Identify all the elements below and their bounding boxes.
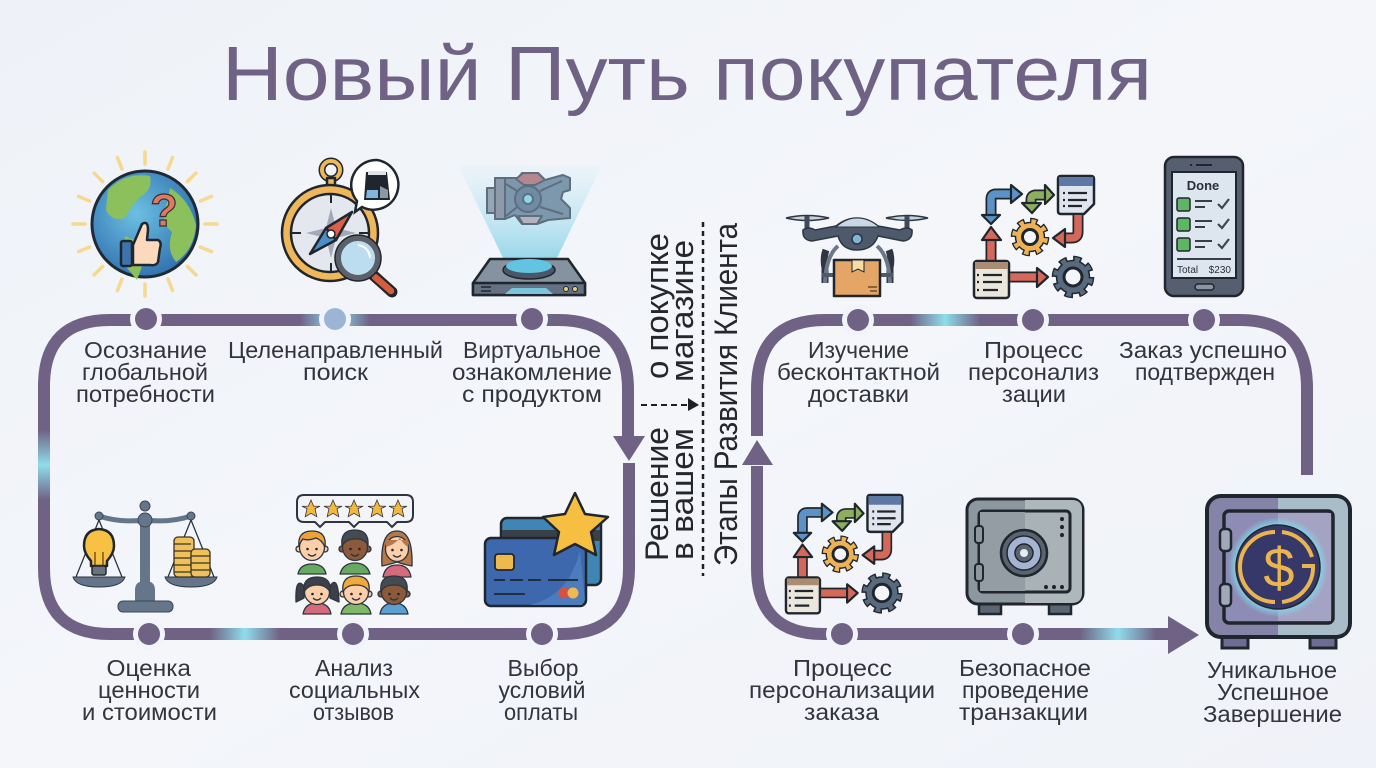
orange gear <box>1014 222 1046 252</box>
thumb up <box>133 223 161 265</box>
labels: top right: Процесс <box>984 337 1083 363</box>
labels: bottom right: Процесс <box>793 655 892 681</box>
person: boy with yellow hair <box>340 576 372 614</box>
person: dark skin blue shirt <box>378 576 410 614</box>
magnifier <box>372 274 392 292</box>
icon: personalization workflow <box>974 176 1094 298</box>
projector base <box>473 259 585 295</box>
labels: bottom left: социальных <box>289 677 420 703</box>
caption: client development stages: Этапы Развития Клиента <box>708 223 744 566</box>
arrow: left path down <box>613 436 645 461</box>
labels: bottom right: Безопасное <box>959 655 1091 681</box>
red arrow to orange gear <box>1053 215 1078 247</box>
left journey path <box>38 314 645 640</box>
labels: top right: Изучение <box>808 337 909 363</box>
labels: top left: Виртуальное <box>463 337 601 363</box>
labels: top left <box>76 337 612 407</box>
central vertical captions: о покупке <box>639 233 675 379</box>
labels: bottom right <box>749 655 1342 727</box>
labels: top left: Целенаправленный <box>228 337 443 363</box>
title: Новый Путь покупателя <box>222 31 1152 117</box>
coins <box>174 537 210 577</box>
labels: top left: поиск <box>303 359 369 385</box>
icon: scales with lightbulb and coins <box>73 501 217 612</box>
caption: decision: Решение <box>639 427 675 561</box>
labels: bottom left <box>82 655 586 725</box>
labels: top right: доставки <box>808 381 909 407</box>
icon: payment cards with star <box>485 493 608 606</box>
labels: bottom left: Оценка <box>106 655 192 681</box>
icon: delivery drone <box>786 216 928 296</box>
icon: phone order confirmation: $230 <box>1209 265 1231 276</box>
lower document <box>974 261 1009 298</box>
labels: bottom right: проведение <box>962 677 1089 703</box>
caption: in your store: в вашем <box>664 428 700 560</box>
person: orange hair <box>296 531 328 574</box>
arrow: to final safe <box>1168 616 1199 654</box>
person: dark skin green shirt <box>339 530 371 574</box>
arrow: right path up <box>742 440 773 465</box>
labels: bottom left: и стоимости <box>82 699 217 725</box>
labels: bottom left: ценности <box>98 677 200 703</box>
icon: lower personalization workflow <box>786 495 902 613</box>
labels: top right: зации <box>1002 381 1066 407</box>
speech bubble with product <box>351 160 398 212</box>
labels: bottom right: Уникальное <box>1207 657 1337 683</box>
dollar sign: $ <box>1263 536 1295 599</box>
icon: glowing final safe <box>1207 496 1350 648</box>
icon: compass with magnifier <box>282 160 398 292</box>
labels: top right: бесконтактной <box>777 359 940 385</box>
icon: globe with thumb and question <box>73 152 217 296</box>
lightbulb <box>84 529 114 566</box>
labels: top right <box>777 337 1287 407</box>
labels: top left: Осознание <box>84 337 207 363</box>
labels: bottom left: оплаты <box>504 699 578 725</box>
labels: top right: Заказ успешно <box>1119 337 1287 363</box>
labels: bottom right: Завершение <box>1203 701 1342 727</box>
icon: phone order confirmation: Total <box>1177 265 1198 276</box>
labels: bottom left: условий <box>498 677 586 703</box>
hologram object <box>487 173 570 224</box>
person: long brown hair <box>382 531 412 577</box>
labels: bottom left: Анализ <box>315 655 393 681</box>
dark gear <box>1056 260 1090 294</box>
labels: bottom left: Выбор <box>508 655 578 681</box>
green arrow <box>1022 185 1054 213</box>
icon: safe <box>967 499 1083 614</box>
labels: bottom left: отзывов <box>313 699 394 725</box>
path nodes <box>130 303 1220 650</box>
labels: top left: глобальной <box>82 359 208 385</box>
dashed arrow <box>641 404 690 406</box>
labels: top left: потребности <box>76 381 215 407</box>
icon: hologram projector <box>458 165 602 295</box>
icon: phone order confirmation: Done <box>1187 178 1219 193</box>
person: girl with pigtails <box>296 577 339 614</box>
labels: top left: с продуктом <box>462 381 602 407</box>
right journey path <box>742 314 1307 654</box>
central vertical captions: магазине <box>664 240 700 382</box>
labels: bottom right: персонализации <box>749 677 935 703</box>
blue arrow <box>982 185 1022 224</box>
labels: top right: персонализ <box>968 359 1099 385</box>
labels: bottom right: транзакции <box>959 699 1088 725</box>
red arrow right <box>1008 268 1048 287</box>
labels: top right: подтвержден <box>1135 359 1275 385</box>
red arrow up <box>982 227 1001 261</box>
labels: top left: ознакомление <box>452 359 612 385</box>
icon: five-star review crowd <box>296 495 413 614</box>
labels: bottom right: Успешное <box>1217 679 1329 705</box>
upper document <box>1058 176 1094 214</box>
question mark: ? <box>150 185 178 236</box>
icon: phone order confirmation <box>1165 157 1243 296</box>
labels: bottom right: заказа <box>804 699 880 725</box>
central vertical captions <box>639 222 744 576</box>
